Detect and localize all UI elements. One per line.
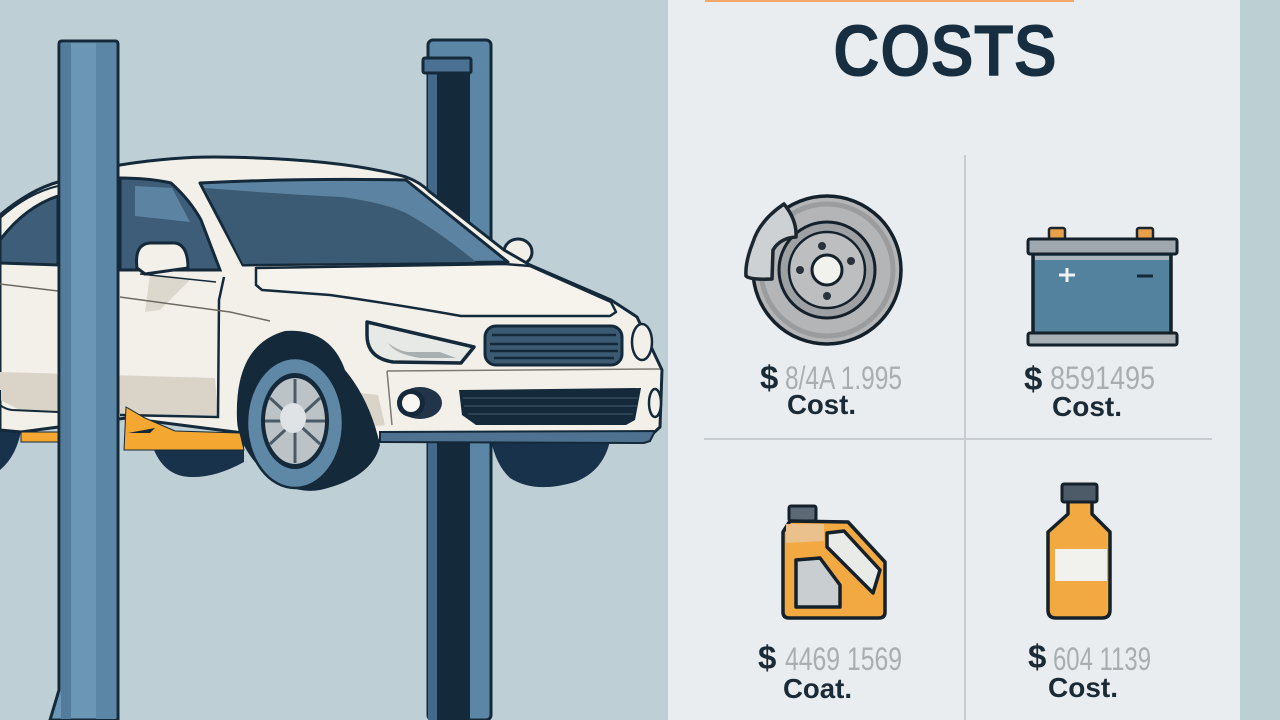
tire sidewall (247, 358, 343, 488)
bumper crease (387, 369, 660, 425)
price: oil jug: Coat. (783, 673, 852, 704)
hood (256, 264, 616, 316)
icon: fluid bottle (1048, 484, 1110, 618)
upper grille (485, 326, 622, 365)
right pillar of car lift (423, 40, 491, 720)
lower body shade (0, 372, 218, 415)
title: COSTS (833, 11, 1057, 92)
bumper lip (380, 431, 655, 443)
lower grille (459, 388, 641, 425)
far-side and rear tires (0, 425, 611, 487)
side mirror (137, 243, 188, 274)
price: fluid bottle: $ (1028, 638, 1046, 675)
headlight (367, 322, 474, 363)
rear window (0, 196, 58, 265)
orange top accent (705, 0, 1074, 2)
panel: costs (668, 0, 1240, 720)
price: brake disc (760, 359, 902, 420)
price: fluid bottle: 604 1139 (1053, 641, 1151, 677)
car on lift (0, 157, 662, 491)
grid dividers (704, 155, 1212, 720)
price: oil jug (758, 639, 902, 704)
price: brake disc: 8/4A 1.995 (785, 360, 902, 396)
price: battery: $ (1024, 360, 1042, 397)
price: battery: Cost. (1052, 391, 1122, 422)
fog lamp (398, 387, 442, 419)
price: oil jug: 4469 1569 (785, 641, 902, 677)
right corner light (649, 389, 661, 417)
price: fluid bottle: Cost. (1048, 672, 1118, 703)
price: fluid bottle (1028, 638, 1151, 703)
icon: battery (1028, 228, 1177, 345)
side marker light (632, 324, 652, 360)
door lines (0, 274, 270, 417)
windshield (200, 179, 508, 265)
lift arm (21, 407, 244, 450)
front tire and wheel arch (237, 331, 380, 491)
left pillar of car lift (50, 41, 118, 720)
icon: brake disc (746, 196, 901, 344)
price: brake disc: $ (760, 359, 778, 396)
wheel rim (265, 378, 325, 464)
mirror on far side (504, 239, 532, 265)
door shading (145, 274, 190, 312)
price: brake disc: Cost. (787, 389, 856, 420)
side window (120, 178, 220, 270)
price: oil jug: $ (758, 639, 776, 676)
price: battery: 8591495 (1050, 360, 1155, 396)
car body (0, 157, 662, 441)
icon: oil jug (783, 506, 885, 618)
price: battery (1024, 360, 1155, 422)
